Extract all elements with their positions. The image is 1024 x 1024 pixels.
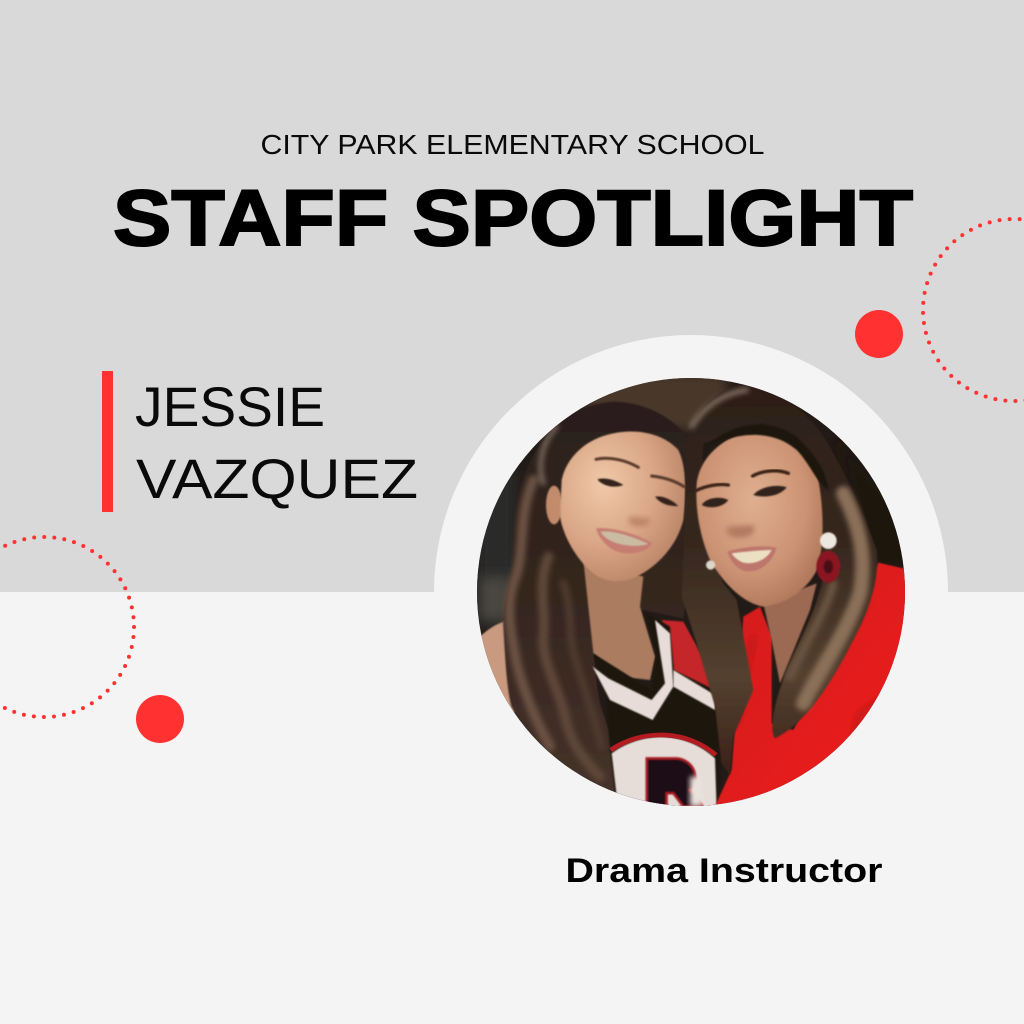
staff name bbox=[135, 375, 418, 510]
girl: eyes, brows, nose and smile bbox=[596, 458, 684, 553]
girl: face bbox=[560, 431, 685, 581]
job title: Drama Instructor bbox=[566, 852, 882, 890]
woman: neck bbox=[763, 583, 817, 683]
woman: eyes, brows, nose and smile bbox=[696, 471, 788, 571]
girl: ear bbox=[546, 486, 562, 524]
girl: hair bbox=[503, 402, 697, 800]
staff name: VAZQUEZ bbox=[136, 447, 418, 510]
photo background bbox=[470, 370, 915, 815]
decorative dotted circle: top right bbox=[923, 219, 1024, 401]
girl: neck and chest bbox=[583, 560, 655, 680]
woman: hair highlights bbox=[692, 390, 863, 703]
decorative dotted circle: left bbox=[0, 537, 134, 717]
title: STAFF SPOTLIGHT bbox=[113, 173, 913, 262]
woman: hair bbox=[682, 385, 877, 775]
decorative red dot: top right bbox=[855, 310, 903, 358]
shirt fold shadows bbox=[747, 636, 878, 733]
girl: cheer uniform bbox=[593, 613, 720, 810]
decorative red dot: left bbox=[136, 695, 184, 743]
woman: hair parting shadow bbox=[703, 424, 828, 490]
background: upper grey panel bbox=[0, 0, 1024, 592]
girl: arm and shoulder bbox=[482, 621, 516, 713]
background: lower light panel bbox=[0, 592, 1024, 1024]
staff name: JESSIE bbox=[135, 375, 325, 438]
school name: CITY PARK ELEMENTARY SCHOOL bbox=[260, 129, 764, 160]
woman: red shirt bbox=[713, 563, 913, 810]
woman: earrings bbox=[706, 532, 840, 583]
girl: wavy hair strands bbox=[509, 427, 602, 777]
woman: face bbox=[696, 428, 823, 607]
portrait photo: two smiling people bbox=[470, 370, 915, 815]
photo arch backing bbox=[434, 335, 948, 592]
girl: red uniform strap bbox=[661, 619, 710, 688]
name accent bar bbox=[102, 371, 113, 512]
